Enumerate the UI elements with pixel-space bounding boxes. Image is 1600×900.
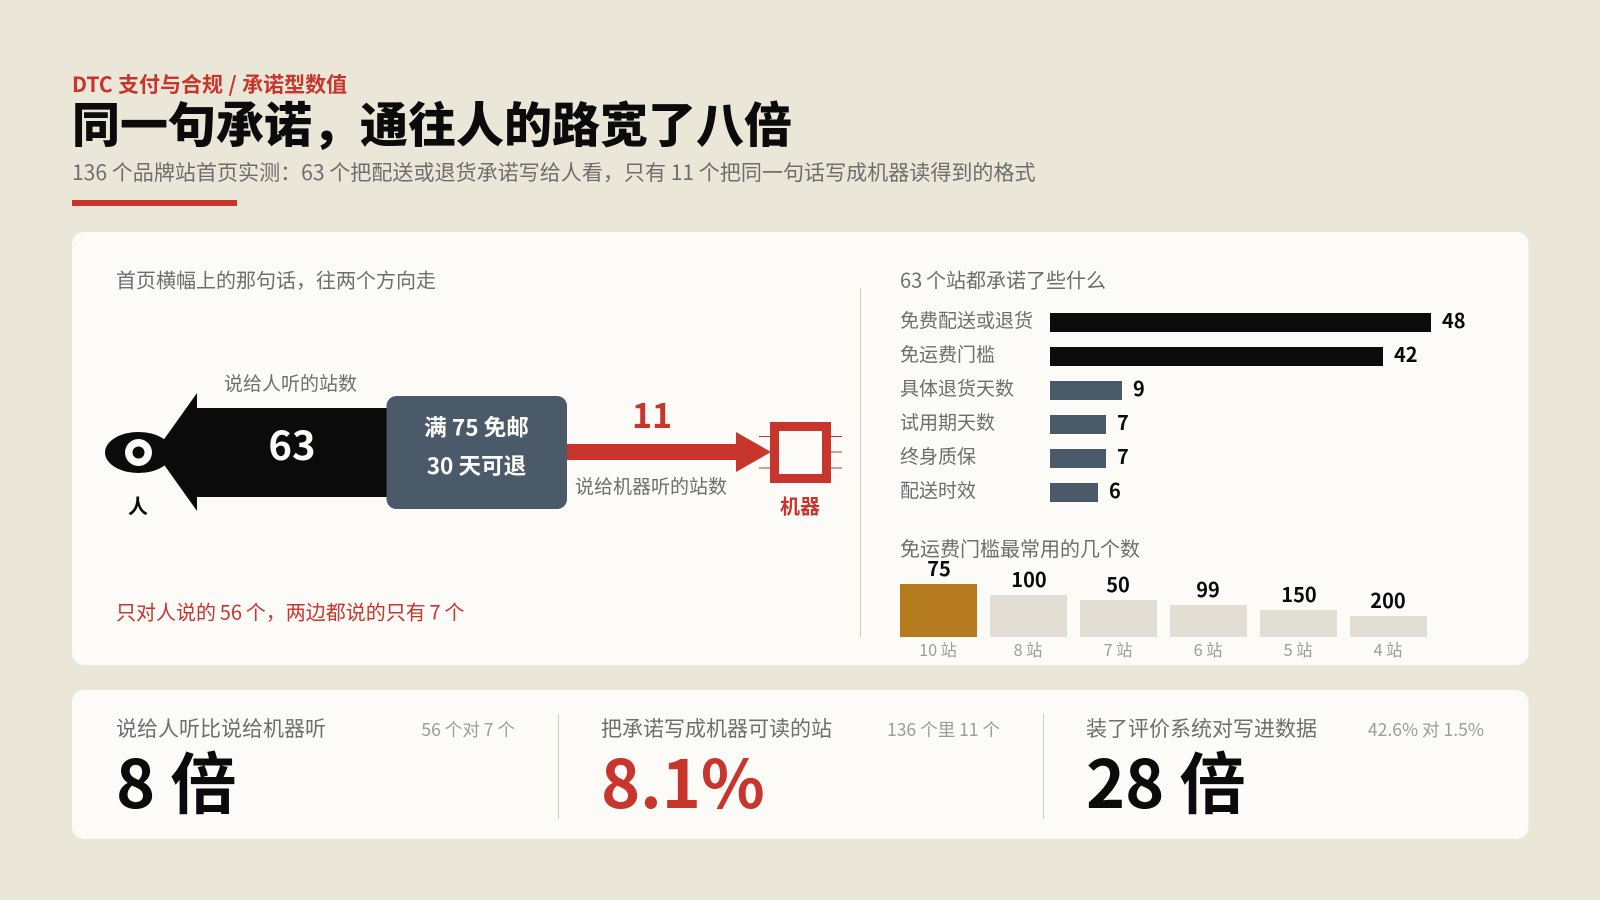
- bar: trial days: 7: [1117, 407, 1129, 436]
- stat: 8.1%: 8.1%: [601, 732, 765, 828]
- promise box: 30 天可退: [427, 448, 526, 481]
- bar: free shipping threshold: 42: [1394, 339, 1418, 368]
- stat: 8.1%: 把承诺写成机器可读的站: [601, 713, 832, 743]
- icon: chip: [759, 426, 842, 478]
- icon: eye: [105, 432, 172, 473]
- column: 150: 150: [1281, 579, 1317, 608]
- bar: free shipping threshold: 免运费门槛: [900, 340, 995, 367]
- bar: delivery time: 6: [1109, 475, 1121, 504]
- stat: 8x: 56 个对 7 个: [421, 717, 515, 742]
- column: 150: [1260, 579, 1337, 661]
- column: 150: 5 站: [1284, 637, 1312, 661]
- column: 75: 10 站: [919, 637, 957, 661]
- column: 50: 7 站: [1104, 637, 1132, 661]
- column: 200: 4 站: [1374, 637, 1402, 661]
- panel: two directions diagram: [105, 264, 842, 626]
- chart: what 63 sites promise: [900, 264, 1466, 504]
- footnote: 只对人说的 56 个，两边都说的只有 7 个: [116, 596, 464, 626]
- bar: return days: 具体退货天数: [900, 374, 1014, 401]
- stat: 8x: 8 倍: [116, 732, 237, 828]
- bar: delivery time: 配送时效: [900, 476, 976, 503]
- bar: trial days: 试用期天数: [900, 408, 995, 435]
- label: machine: 机器: [780, 490, 820, 520]
- stat: 8x: 说给人听比说给机器听: [116, 713, 326, 743]
- subtitle: 136 个品牌站首页实测：63 个把配送或退货承诺写给人看，只有 11 个把同一句话写成机器读得到的格式: [72, 157, 1036, 187]
- diagram heading: 首页横幅上的那句话，往两个方向走: [116, 264, 436, 294]
- panel: stats: [72, 690, 1528, 839]
- column: 99: 6 站: [1194, 637, 1222, 661]
- column: 99: [1170, 574, 1247, 661]
- column: 75: 75: [927, 553, 951, 582]
- chart heading: 免运费门槛最常用的几个数: [900, 533, 1140, 562]
- accent bar: [72, 200, 237, 206]
- bar: lifetime warranty: 7: [1117, 441, 1129, 470]
- promise box: [386, 396, 567, 509]
- bar: free shipping threshold: [900, 339, 1418, 368]
- stat: 28x: 装了评价系统对写进数据: [1086, 713, 1317, 743]
- bar: free shipping or returns: [900, 305, 1466, 334]
- arrow: to machines: [567, 432, 771, 472]
- bar: lifetime warranty: [900, 441, 1129, 470]
- arrow: to people: [155, 393, 387, 511]
- bar: return days: [900, 373, 1145, 402]
- column: 200: [1350, 585, 1427, 661]
- stat: 28x: 42.6% 对 1.5%: [1368, 717, 1484, 742]
- column: 99: 99: [1196, 574, 1220, 603]
- label: sites told to people: 说给人听的站数: [224, 369, 357, 396]
- stat: 8.1%: 136 个里 11 个: [887, 717, 1000, 742]
- bar: free shipping or returns: 免费配送或退货: [900, 306, 1033, 333]
- header: [72, 69, 1036, 206]
- column: 100: [990, 564, 1067, 661]
- promise box: 满 75 免邮: [424, 410, 529, 442]
- value 11: 11: [632, 389, 672, 438]
- stat: 8.1%: [601, 713, 1000, 828]
- value 63: 63: [268, 414, 316, 472]
- label: person: 人: [128, 490, 148, 520]
- column: 200: 200: [1370, 585, 1406, 614]
- bar: return days: 9: [1133, 373, 1145, 402]
- chart: common thresholds: [900, 533, 1427, 661]
- column: 50: [1080, 569, 1157, 661]
- stat: 28x: [1086, 713, 1484, 828]
- column: 100: 100: [1011, 564, 1047, 593]
- bar: free shipping or returns: 48: [1442, 305, 1466, 334]
- bar: delivery time: [900, 475, 1121, 504]
- bar: trial days: [900, 407, 1129, 436]
- label: sites told to machines: 说给机器听的站数: [575, 472, 727, 499]
- column: 100: 8 站: [1014, 637, 1042, 661]
- bar: lifetime warranty: 终身质保: [900, 442, 976, 469]
- chart heading: 63 个站都承诺了些什么: [900, 264, 1106, 294]
- stat: 8x: [116, 713, 515, 828]
- title: 同一句承诺，通往人的路宽了八倍: [72, 86, 792, 156]
- column: 50: 50: [1106, 569, 1130, 598]
- column: 75: [900, 553, 977, 661]
- kicker: DTC 支付与合规 / 承诺型数值: [72, 69, 347, 99]
- panel: main: [72, 232, 1528, 665]
- stat: 28x: 28 倍: [1086, 732, 1246, 828]
